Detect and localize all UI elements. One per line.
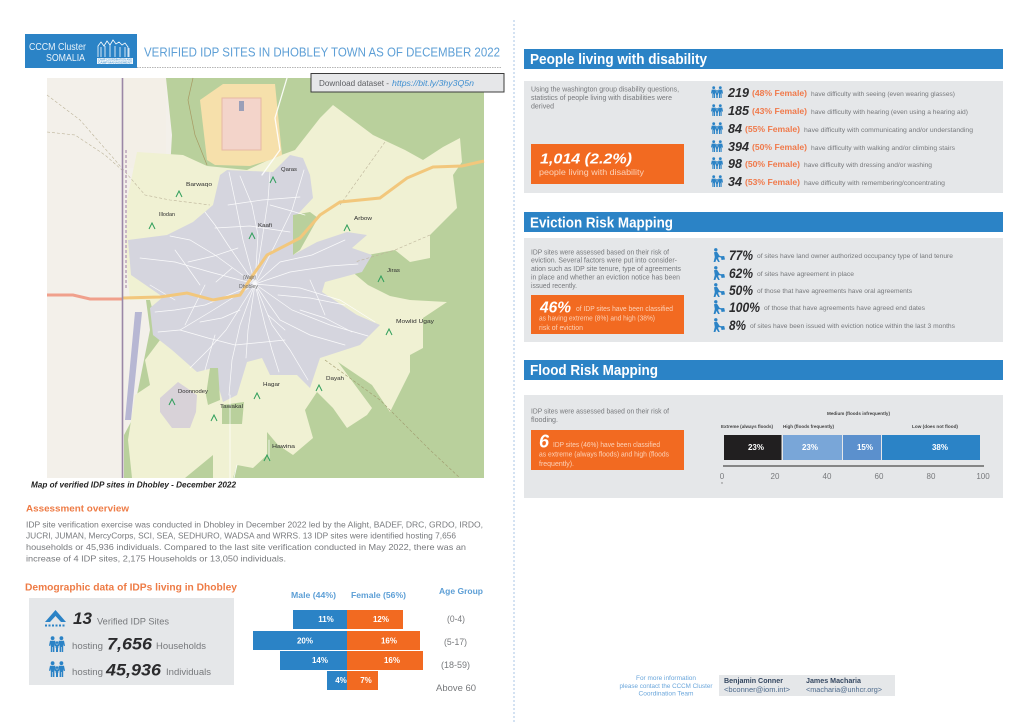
stacked bar chart: flood risk: 0 [720,472,725,481]
stat: oral agreements: of those that have agreements have oral agreements [757,288,912,295]
stat: hearing [711,103,968,118]
heading [524,212,1003,232]
individuals figure: 45,936 [105,660,162,680]
site labels: Dhobley [239,284,258,290]
download dataset box: https://bit.ly/3hy3Q5n [392,78,474,88]
population pyramid chart: 7% [360,676,372,685]
stat: agreed end dates: 100% [729,299,760,315]
airstrip [125,312,142,420]
population pyramid chart: (5-17) [444,637,467,647]
heading [524,49,1003,69]
stat: communicating: (55% Female) [745,125,800,134]
stacked bar chart: flood risk: Medium (floods infrequently) [827,411,890,417]
intro text: flooding. [531,415,558,424]
intro text: eviction. Several factors were put into consider- [531,256,678,264]
site labels: Barwaqo [186,182,212,188]
stat: walking [711,139,955,154]
stacked bar chart: flood risk: Extreme (always floods) [721,424,773,430]
stat: remembering [711,174,946,189]
households figure: Households [156,641,207,651]
site labels: Qaras [281,167,297,173]
stat: dressing: have difficulty with dressing and/or washing [804,162,933,169]
intro text [531,248,681,290]
households figure: hosting [72,641,103,651]
stat: land tenure: 77% [729,247,753,263]
stat: eviction notice: of sites have been issued with eviction notice within the last 3 months [750,323,955,330]
stat: walking: (50% Female) [752,143,807,152]
stat: communicating: 84 [728,121,743,136]
stat: oral agreements [714,282,912,298]
stat: hearing: (43% Female) [752,107,807,116]
contact prompt: please contact the CCCM Cluster [620,683,712,690]
site labels [159,167,434,450]
site labels: Hagar [263,382,280,388]
site labels: Illodan [159,212,175,218]
callout: total with disability: people living with disability [539,167,645,177]
verified sites figure: Verified IDP Sites [97,616,170,626]
contact details: James Macharia [806,678,861,685]
stat: seeing: 219 [727,85,750,100]
assessment overview heading: Assessment overview [26,504,130,514]
callout: eviction share: 46% [539,300,571,316]
panel: demographic key figures [29,598,234,685]
callout: eviction share: risk of eviction [539,325,583,332]
site markers [149,177,392,461]
verified sites figure: 13 [73,609,93,628]
intro text [531,84,679,110]
intro text: IDP sites were assessed based on their risk of [531,406,670,416]
stacked bar chart: flood risk [720,411,990,484]
section: people living with disability [524,49,1003,193]
stat: oral agreements: 50% [729,282,753,298]
households figure: 7,656 [107,634,153,654]
verified sites figure [73,609,170,628]
stat: agreement in place [714,265,855,281]
download dataset box: Download dataset - [319,78,389,88]
assessment overview text: IDP site verification exercise was conducted in Dhobley in December 2022 led by the Alight, BADEF, DRC, GRDO, IRDO, [26,520,483,530]
site labels: Doonnodey [178,389,208,395]
street network [140,78,375,478]
stacked bar chart: flood risk: 23% [802,443,818,452]
stacked bar chart: flood risk: 100 [976,472,990,481]
demographic heading: Demographic data of IDPs living in Dhobley [25,582,237,594]
population pyramid chart: Above 60 [436,683,476,693]
households figure [72,634,207,654]
callout: flood share: as extreme (always floods) and high (floods [539,452,669,458]
stat: hearing: have difficulty with hearing (even using a hearing aid) [811,109,968,116]
contact prompt: For more information [636,675,696,682]
heading: Flood Risk Mapping [530,363,658,379]
intro text: in place and whether an eviction notice has been [531,272,680,282]
icon: people [49,661,65,677]
section: flood risk mapping [524,360,1003,498]
title: VERIFIED IDP SITES IN DHOBLEY TOWN AS OF DECEMBER 2022 [144,46,500,60]
site labels: Jiras [387,268,400,274]
stacked bar chart: flood risk: 15% [857,443,873,452]
border line [122,78,124,478]
site labels: Hawina [272,444,296,450]
header: cluster logo block [25,34,137,68]
heading: Eviction Risk Mapping [530,216,673,232]
callout: eviction share: as having extreme (8%) and high (38%) [539,316,655,322]
stat: communicating [711,121,974,136]
population pyramid chart: 20% [297,636,313,646]
stacked bar chart: flood risk: 23% [748,443,764,452]
contact details: <macharia@unhcr.org> [806,687,882,694]
stacked bar chart: flood risk: 38% [932,443,948,452]
stacked bar chart: flood risk: 20 [771,472,780,481]
site labels: Arbow [354,216,372,222]
intro text: derived [531,102,554,110]
stat: dressing [711,156,933,171]
stat: land tenure [714,247,954,263]
assessment overview text: JUCRI, JUMAN, MercyCorps, SCI, SEA, SEDHURO, WADSA and WRRS. 13 IDP sites were identified hosting 7,656 [26,530,456,540]
site labels: (Wajir) [243,275,256,281]
map caption: Map of verified IDP sites in Dhobley - December 2022 [31,480,237,490]
stat: walking: have difficulty with walking and/or climbing stairs [811,145,955,152]
stacked bar chart: flood risk: Low (does not flood) [912,424,958,430]
panel: disability [524,81,1003,193]
population pyramid chart: 16% [384,656,400,665]
contact details: <bconner@iom.int> [724,687,790,694]
callout: eviction share: of IDP sites have been classified [576,306,673,313]
stat: remembering: have difficulty with remembering/concentrating [804,180,946,187]
population pyramid chart: 16% [381,636,397,646]
population pyramid chart: 11% [318,615,334,624]
download dataset box [311,74,504,92]
stacked bar chart: flood risk: 80 [927,472,936,481]
stat: remembering: (53% Female) [745,178,800,187]
header: cluster logo block: CCCM Cluster [29,42,87,53]
stat: dressing: (50% Female) [745,160,800,169]
header: cluster logo block: SOMALIA [46,53,85,64]
stat: agreed end dates [714,299,925,315]
stat: walking: 394 [728,139,750,154]
stat: seeing [711,85,955,100]
individuals figure [72,660,212,680]
population pyramid chart: 4% [335,676,347,685]
contact prompt [620,675,712,698]
heading [524,360,1003,380]
site labels: Mowlid Ugay [396,319,434,325]
icon: people [49,636,65,652]
farmland [125,105,462,478]
panel: eviction [524,238,1003,342]
intro text: issued recently. [531,281,577,290]
stat: agreement in place: 62% [729,265,753,281]
stacked bar chart: flood risk: 60 [875,472,884,481]
heading: People living with disability [530,52,707,68]
stat: seeing: (48% Female) [752,89,807,98]
header: cluster logo block: CAMP MANAGEMENT [98,61,133,64]
population pyramid chart: Female (56%) [351,590,406,600]
population pyramid chart: 12% [373,615,389,624]
site labels: Dayah [326,376,344,382]
population pyramid chart: (18-59) [441,660,470,670]
population pyramid chart: 14% [312,656,328,665]
tracks [47,95,460,478]
individuals figure: hosting [72,667,103,677]
contact details: Benjamin Conner [724,678,783,685]
site labels: Kaafi [258,223,272,229]
assessment overview text: increase of 4 IDP sites, 2,175 Households or 13,050 individuals. [26,554,286,564]
population pyramid chart: (0-4) [447,614,465,624]
individuals figure: Individuals [166,667,212,677]
stat: remembering: 34 [728,174,743,189]
intro text: Using the washington group disability questions, [531,84,679,94]
callout: total with disability [531,144,684,184]
callout: flood share: IDP sites (46%) have been classified [553,442,660,449]
callout: eviction share [531,295,684,334]
assessment overview text [26,520,483,564]
stat: eviction notice [714,317,955,333]
forest areas [124,78,484,478]
callout: flood share [531,430,684,470]
stat: dressing: 98 [728,156,743,171]
header: cluster logo block: CAMP COORDINATION AND [98,58,132,62]
callout: flood share: 6 [539,432,550,452]
stat: land tenure: of sites have land owner authorized occupancy type of land tenure [757,253,954,260]
callout: flood share: frequently). [539,461,574,468]
population pyramid chart: Age Group [439,586,483,596]
callout: total with disability: 1,014 (2.2%) [540,150,632,168]
intro text [531,406,670,424]
stat: communicating: have difficulty with communicating and/or understanding [804,127,974,134]
built-up town [128,155,380,402]
assessment overview text: households or 45,936 individuals. Compared to the last site verification conducted in May 2022, there was an [26,542,466,552]
stacked bar chart: flood risk: 40 [823,472,832,481]
stat: seeing: have difficulty with seeing (even wearing glasses) [811,91,955,98]
map of Dhobley [47,78,484,478]
contact details [719,675,895,696]
panel: flood [524,395,1003,498]
contact prompt: Coordination Team [638,690,694,698]
icon: tent [45,610,66,626]
population pyramid chart [253,586,483,693]
stacked bar chart: flood risk: High (floods frequently) [783,424,834,430]
population pyramid chart: Male (44%) [291,590,336,600]
stat: agreement in place: of sites have agreement in place [757,271,855,278]
main road [123,161,484,300]
stat: hearing: 185 [728,103,750,118]
stat: eviction notice: 8% [729,317,746,333]
stat: agreed end dates: of those that have agreements have agreed end dates [764,305,925,312]
intro text: statistics of people living with disabilities were [531,93,672,102]
intro text: ation such as IDP site tenure, type of agreements [531,264,681,273]
site labels: Tawakal [220,404,243,410]
intro text: IDP sites were assessed based on their risk of [531,248,670,256]
section: eviction risk mapping [524,212,1003,342]
